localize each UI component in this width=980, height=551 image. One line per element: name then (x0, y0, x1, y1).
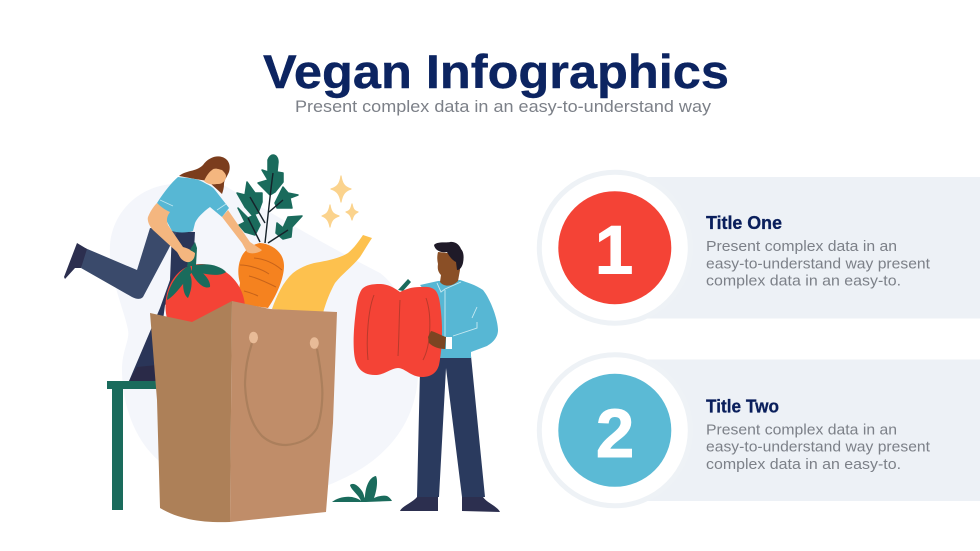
woman: shirt (157, 177, 229, 232)
background blob (110, 179, 418, 497)
man: right shoe (462, 497, 500, 512)
woman: gripping hand (178, 249, 195, 262)
woman (64, 156, 230, 381)
small plant (332, 476, 392, 502)
bag: right face (230, 301, 337, 522)
woman: face (204, 169, 226, 184)
woman: right arm and hand (222, 210, 262, 253)
item two: circle (558, 374, 671, 487)
apple: body (354, 284, 442, 377)
carrot: stems (248, 173, 288, 243)
item two: number: 2 (596, 395, 634, 472)
bag: handle (245, 343, 322, 445)
paper bag (150, 301, 337, 522)
bag: left face (150, 301, 232, 522)
man: shirt (420, 280, 498, 358)
woman: raised leg (81, 228, 177, 299)
woman: sleeve lines (160, 200, 226, 210)
man: hand (428, 331, 446, 349)
banana (272, 235, 372, 313)
man: trousers (417, 356, 485, 497)
item two: heading: Title Two (706, 396, 779, 416)
man: left shoe (400, 497, 438, 511)
illustration: vegan shopping scene (64, 155, 500, 522)
title: Vegan Infographics (263, 45, 729, 98)
item two: ring (539, 355, 690, 506)
item one: body text: easy-to-understand way present (706, 255, 931, 272)
item one: band (640, 177, 980, 318)
item two: body text: complex data in an easy-to. (706, 456, 901, 473)
tomato: body (166, 264, 245, 324)
carrot: markings (240, 258, 282, 296)
woman: shoe (64, 243, 87, 279)
item one: circle (558, 191, 671, 304)
table (107, 381, 159, 510)
apple: stem (398, 279, 411, 291)
item one: body text: Present complex data in an (706, 238, 897, 255)
woman: shoe on table (129, 365, 157, 381)
carrot: leaves (237, 155, 302, 239)
item two: body text: easy-to-understand way present (706, 439, 931, 456)
panel: item one (539, 172, 980, 323)
woman: hair (179, 156, 230, 194)
carrot: body (238, 243, 284, 308)
bag: buttons (249, 332, 319, 349)
carrot (237, 155, 302, 308)
item one: heading: Title One (706, 213, 782, 233)
man (354, 242, 500, 512)
item one: number: 1 (595, 212, 633, 288)
apple: ribs (367, 295, 430, 360)
man: collar and shirt lines (437, 282, 477, 337)
sparkles (322, 176, 358, 227)
subtitle: Present complex data in an easy-to-understand way (295, 97, 712, 116)
man: hair (434, 242, 464, 270)
item two: body text: Present complex data in an (706, 421, 897, 438)
tomato (166, 242, 245, 324)
tomato: leaves (167, 242, 226, 300)
man: cuff (446, 337, 452, 349)
item one: ring (539, 172, 690, 323)
woman: standing leg (129, 231, 195, 381)
item two: band (640, 360, 980, 501)
panel: item two (539, 355, 980, 506)
woman: left arm (148, 203, 195, 262)
apple (354, 279, 442, 377)
item one: body text: complex data in an easy-to. (706, 273, 901, 290)
man: neck and face (437, 252, 460, 286)
